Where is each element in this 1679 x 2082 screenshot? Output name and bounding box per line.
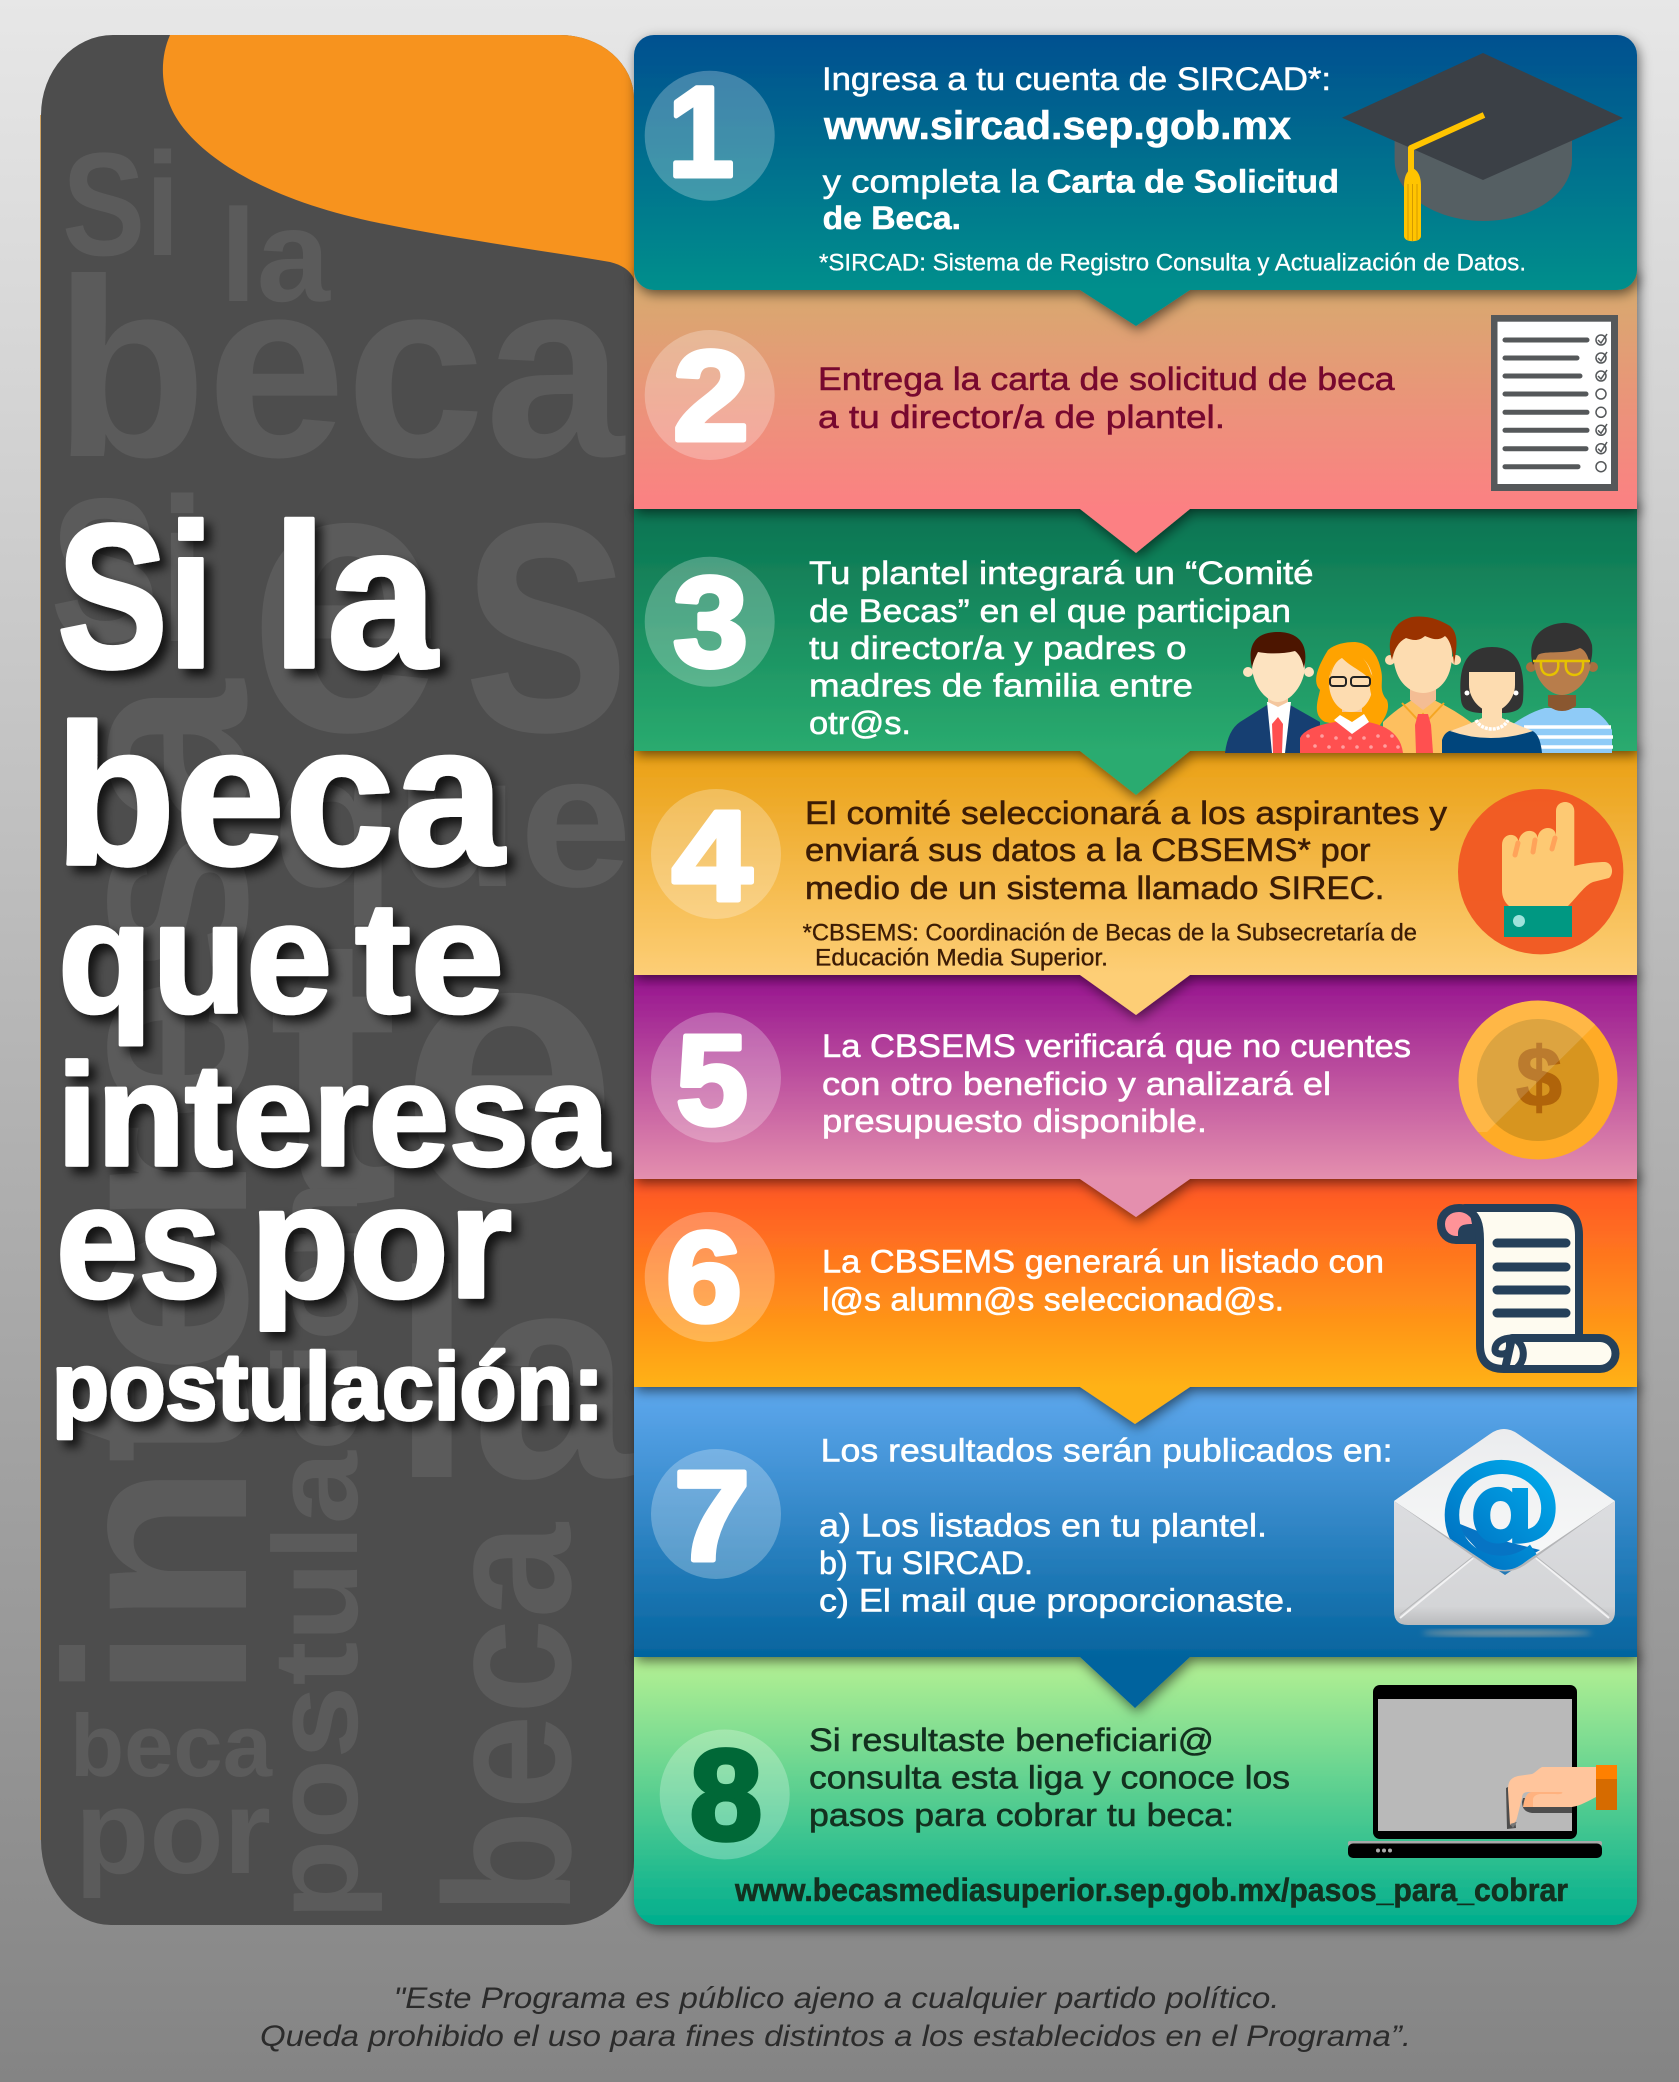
icon: checklist [1491, 315, 1618, 491]
ghost word pattern: la [392, 1210, 634, 1540]
text: step 8: consulta esta liga y conoce los [809, 1760, 1290, 1796]
ghost word pattern: e [248, 381, 443, 812]
text: step 1: Ingresa a tu cuenta de SIRCAD*: [822, 61, 1331, 97]
text: step 3 [809, 555, 1314, 741]
icon: paper scroll [1441, 1208, 1615, 1369]
text: step 2 [818, 361, 1395, 435]
number badge 5 [651, 1009, 781, 1152]
number badge 6: 6 [666, 1206, 742, 1349]
number badge 8 [660, 1724, 790, 1867]
number badge 4: 4 [672, 785, 752, 928]
text: step 6: l@s alumn@s seleccionad@s. [822, 1282, 1284, 1318]
number badge 2: 2 [673, 325, 749, 468]
icon: committee group of people [1225, 617, 1613, 753]
number badge 7: 7 [674, 1445, 750, 1588]
icon: gold coin [1458, 1000, 1618, 1160]
text: step 3: madres de familia entre [809, 668, 1193, 704]
title: la [272, 482, 439, 711]
text: step 4: El comité seleccionará a los aspirantes y [805, 795, 1447, 831]
title: interesa [57, 1034, 610, 1196]
text: step 1: www.sircad.sep.gob.mx [823, 104, 1291, 148]
text: step 8: www.becasmediasuperior.sep.gob.mx/pasos_para_cobrar [734, 1872, 1568, 1908]
panel: step 8 [634, 1650, 1637, 1925]
title: beca [55, 684, 506, 907]
number badge 2 [645, 325, 775, 468]
text: step 1: *SIRCAD: Sistema de Registro Consulta y Actualización de Datos. [819, 250, 1526, 277]
panel: step 6 [634, 1170, 1637, 1424]
number badge 3: 3 [673, 551, 748, 694]
number badge 5: 5 [676, 1009, 748, 1152]
text: step 8: pasos para cobrar tu beca: [809, 1797, 1234, 1833]
title [52, 482, 610, 1440]
text: step 2: Entrega la carta de solicitud de beca [818, 361, 1395, 397]
text: step 5: La CBSEMS verificará que no cuentes [822, 1028, 1411, 1064]
title: que [58, 870, 332, 1046]
panel: left title panel [12, 35, 634, 1925]
text: step 4: Educación Media Superior. [815, 945, 1108, 972]
ghost word pattern: postulación [249, 1180, 383, 1920]
text: step 7: a) Los listados en tu plantel. [819, 1508, 1267, 1544]
panel: step 1 [634, 35, 1637, 326]
number badge 1 [645, 61, 775, 204]
ghost word pattern [12, 123, 634, 1920]
text: step 5: con otro beneficio y analizará el [822, 1066, 1331, 1102]
footer disclaimer: "Este Programa es público ajeno a cualquier partido político. [394, 1982, 1280, 2015]
footer disclaimer [260, 1982, 1411, 2053]
panel: step 7 [634, 1380, 1637, 1708]
panel: step 2 [634, 270, 1637, 553]
footer disclaimer: Queda prohibido el uso para fines distintos a los establecidos en el Programa”. [260, 2020, 1411, 2053]
number badge 4 [651, 785, 781, 928]
person: man in navy suit [1225, 632, 1320, 753]
text: step 1: y completa la [823, 164, 1039, 200]
ghost word pattern: Si [50, 456, 205, 685]
text: step 6 [822, 1244, 1384, 1318]
text: step 2: a tu director/a de plantel. [818, 399, 1225, 435]
text: step 4: medio de un sistema llamado SIREC. [805, 870, 1384, 906]
text: step 5 [822, 1028, 1411, 1139]
number badge 3 [645, 551, 775, 694]
ghost word pattern: la [220, 182, 332, 329]
text: step 7: b) Tu SIRCAD. [819, 1545, 1033, 1581]
number badge 7 [651, 1445, 781, 1588]
ghost word pattern: interesa [12, 678, 301, 1700]
ghost word pattern: Si [62, 123, 180, 287]
ghost word pattern: beca [54, 226, 626, 510]
ghost word pattern: beca [70, 1696, 273, 1795]
text: step 3: de Becas” en el que participan [809, 593, 1291, 629]
text: step 6: La CBSEMS generará un listado con [822, 1244, 1384, 1280]
ghost word pattern: beca [408, 1521, 609, 1915]
text: step 1 [819, 61, 1526, 277]
number badge 8: 8 [690, 1724, 762, 1867]
number badge 6 [645, 1206, 775, 1349]
text: step 4 [803, 795, 1447, 972]
text: step 7: c) El mail que proporcionaste. [819, 1583, 1294, 1619]
orange corner shape [163, 35, 634, 279]
text: step 3: tu director/a y padres o [809, 630, 1186, 666]
text: step 7 [819, 1433, 1393, 1619]
title: te [355, 870, 504, 1046]
number badge 1: 1 [668, 61, 734, 204]
icon: envelope with at sign [1394, 1429, 1615, 1636]
icon: envelope with at sign: @ [1438, 1434, 1563, 1576]
ghost word pattern: que [272, 715, 632, 927]
title: postulación: [52, 1334, 604, 1440]
icon: graduation cap [1342, 53, 1623, 241]
icon: gold coin: $ [1516, 1030, 1562, 1124]
icon: laptop with pointing hand [1348, 1685, 1617, 1858]
person: man with red hair [1383, 617, 1472, 753]
text: step 5: presupuesto disponible. [822, 1103, 1207, 1139]
text: step 8 [734, 1722, 1568, 1908]
person: woman with black hair [1442, 647, 1542, 753]
text: step 4: *CBSEMS: Coordinación de Becas de la Subsecretaría de [803, 920, 1417, 947]
panel: step 3 [634, 500, 1637, 795]
text: step 7: Los resultados serán publicados en: [821, 1433, 1393, 1469]
ghost word pattern: por [75, 1765, 271, 1899]
title: es [56, 1152, 221, 1331]
text: step 3: otr@s. [809, 705, 911, 741]
person: woman with orange hair [1300, 642, 1403, 753]
title: por [250, 1152, 512, 1331]
icon: raised finger hand [1458, 789, 1623, 954]
panel: step 5 [634, 970, 1637, 1217]
text: step 3: Tu plantel integrará un “Comité [809, 555, 1314, 591]
text: step 1: Carta de Solicitud [1047, 164, 1339, 200]
panel: step 4 [634, 745, 1637, 1015]
person: man with glasses [1513, 623, 1613, 753]
ghost word pattern: s [460, 381, 632, 812]
text: step 8: Si resultaste beneficiari@ [809, 1722, 1214, 1758]
text: step 1: de Beca. [823, 200, 961, 236]
text: step 4: enviará sus datos a la CBSEMS* por [805, 832, 1371, 868]
ghost word pattern: te [268, 851, 618, 1282]
title: Si [57, 482, 214, 711]
